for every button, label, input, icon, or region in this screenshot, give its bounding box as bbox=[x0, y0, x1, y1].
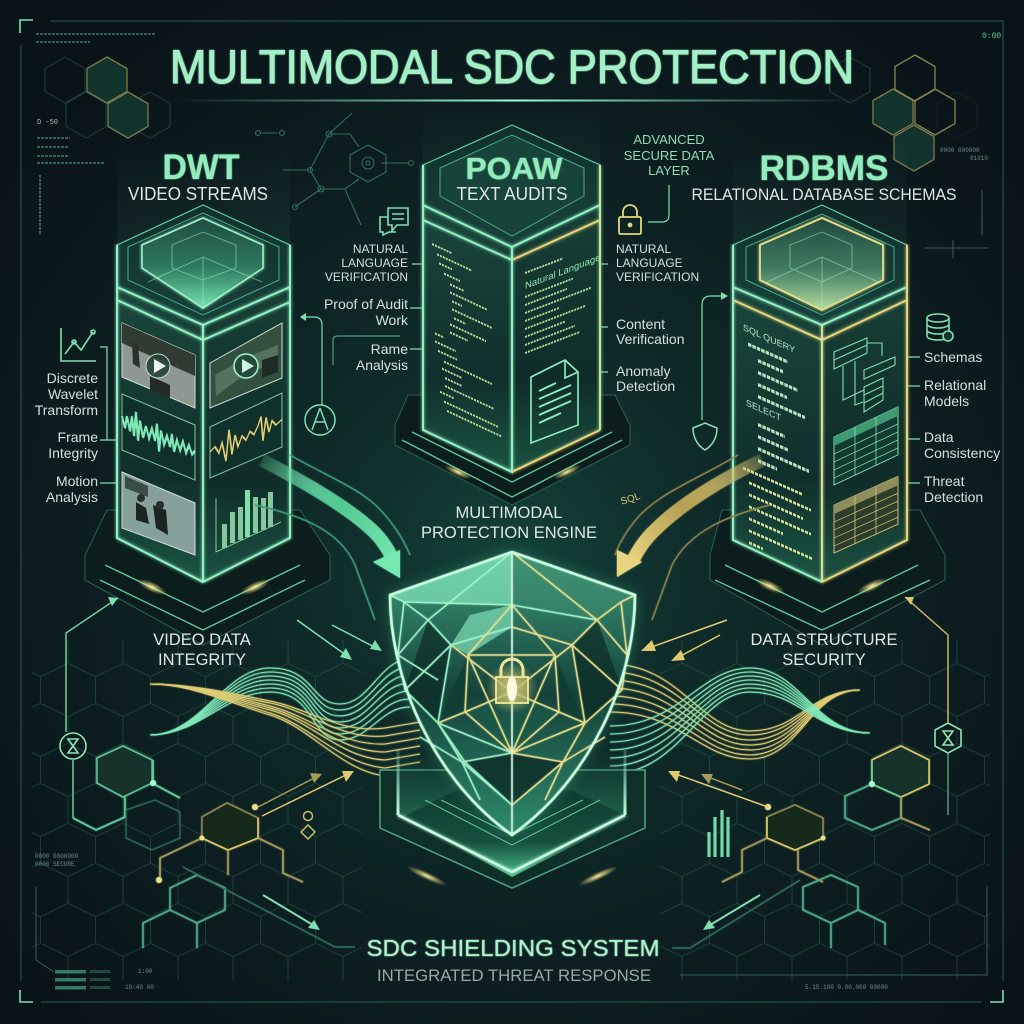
icon: padlock on shield bbox=[486, 659, 538, 714]
labels: text pillar left: NATURAL bbox=[353, 242, 408, 256]
labels: text pillar left: Proof of Audit bbox=[324, 296, 408, 312]
label: video data integrity bbox=[153, 631, 251, 669]
subheading: relational database schemas: RELATIONAL DATABASE SCHEMAS bbox=[692, 185, 956, 204]
labels: RDBMS pillar: Relational bbox=[924, 377, 986, 393]
labels: video pillar: Wavelet bbox=[48, 386, 98, 402]
natural language notes: Natural Language bbox=[525, 252, 601, 292]
tiny readouts: 1:00 bbox=[138, 968, 153, 975]
decorative readout bars bbox=[55, 970, 110, 990]
label: data structure security: DATA STRUCTURE bbox=[751, 631, 897, 649]
panel: RDBMS pillar bbox=[710, 130, 945, 645]
schema diagram bbox=[834, 338, 895, 412]
pillar faces bbox=[117, 287, 290, 582]
tiny readouts: 0:00 bbox=[982, 32, 1001, 41]
labels: text pillar left: Work bbox=[376, 312, 409, 328]
heading: RDBMS: RDBMS bbox=[760, 149, 888, 188]
SQL listing: SELECT bbox=[746, 397, 781, 423]
tiny readouts: 0000 000000 bbox=[940, 147, 980, 154]
code listing bbox=[432, 244, 502, 437]
labels: video pillar: Transform bbox=[35, 402, 98, 418]
label: video data integrity: INTEGRITY bbox=[158, 651, 246, 669]
label: video data integrity: VIDEO DATA bbox=[153, 631, 251, 649]
bar chart bbox=[216, 490, 281, 552]
connector lines bbox=[100, 185, 920, 483]
title: MULTIMODAL SDC PROTECTION bbox=[170, 40, 854, 93]
icon: padlock bbox=[619, 205, 641, 234]
panel: DWT video pillar bbox=[85, 130, 330, 645]
data waves: right green bbox=[610, 668, 870, 774]
label: data structure security bbox=[751, 631, 897, 669]
heading: multimodal protection engine: MULTIMODAL bbox=[456, 504, 562, 522]
small arrows bbox=[66, 597, 948, 930]
icon: compass bbox=[305, 405, 335, 435]
tiny readouts: 0000 SECURE bbox=[35, 861, 75, 868]
labels: video pillar: Frame bbox=[58, 429, 98, 445]
system heading: SDC SHIELDING SYSTEM bbox=[366, 935, 660, 961]
shield wireframe bbox=[390, 552, 635, 835]
small icons lower bbox=[301, 810, 728, 857]
bright hexagon paths: left bbox=[73, 746, 355, 948]
labels: text pillar left bbox=[324, 242, 409, 373]
icon: equalizer bars bbox=[709, 810, 728, 857]
labels: RDBMS pillar: Detection bbox=[924, 489, 983, 505]
labels: text pillar right: VERIFICATION bbox=[616, 270, 699, 284]
heading: multimodal protection engine bbox=[421, 504, 597, 542]
icon: line chart bbox=[61, 328, 96, 361]
pillar outline bbox=[423, 165, 600, 472]
labels: text pillar right: LANGUAGE bbox=[616, 256, 683, 270]
data waves: right gold bbox=[610, 664, 860, 759]
circuit network bbox=[256, 113, 414, 225]
system subheading: INTEGRATED THREAT RESPONSE bbox=[377, 967, 651, 985]
tiny readouts: 10:40 00 bbox=[125, 984, 154, 991]
heading: DWT: DWT bbox=[162, 148, 240, 187]
pillar base bbox=[395, 395, 630, 505]
shield facets bbox=[390, 552, 635, 805]
labels: text pillar right: Anomaly bbox=[616, 363, 670, 379]
labels: RDBMS pillar: Threat bbox=[924, 473, 965, 489]
labels: text pillar right: NATURAL bbox=[616, 242, 671, 256]
pillar faces bbox=[733, 287, 907, 582]
labels: text pillar left: LANGUAGE bbox=[341, 256, 408, 270]
arrow: video to engine bbox=[255, 455, 410, 620]
labels: text pillar left: VERIFICATION bbox=[325, 270, 408, 284]
label: data structure security: SECURITY bbox=[782, 651, 866, 669]
icon: target and diamond bbox=[301, 812, 315, 839]
labels: text pillar right bbox=[616, 242, 699, 394]
labels: RDBMS pillar: Schemas bbox=[924, 349, 982, 365]
label: SQL tag: SQL bbox=[619, 491, 642, 508]
heading: POAW: POAW bbox=[466, 151, 563, 186]
pillar faces bbox=[423, 205, 600, 472]
data waves: left gold bbox=[150, 684, 420, 776]
icon: hourglass right bbox=[935, 723, 961, 753]
icon: hourglass left bbox=[60, 733, 86, 759]
top crystal bbox=[142, 218, 263, 308]
tiny readouts: 01010 bbox=[970, 155, 988, 162]
tiny readouts: D -50 bbox=[37, 119, 58, 127]
tiny readouts: 0000 0000000 bbox=[35, 853, 79, 860]
video frame right bbox=[210, 323, 282, 408]
pillar outline bbox=[117, 245, 290, 582]
labels: text pillar right: Content bbox=[616, 316, 665, 332]
subheading: text audits: TEXT AUDITS bbox=[456, 184, 568, 204]
pillar base bbox=[85, 510, 330, 645]
shield pedestal bbox=[380, 750, 645, 889]
label: advanced secure data layer bbox=[624, 132, 715, 178]
labels: RDBMS pillar: Data bbox=[924, 429, 954, 445]
waveform green bbox=[122, 394, 195, 480]
table: green bbox=[834, 407, 898, 485]
icon: small shield bbox=[693, 423, 717, 450]
video frame bottom bbox=[122, 472, 195, 555]
arrow: database to engine bbox=[615, 455, 770, 620]
waveform gold bbox=[210, 393, 282, 478]
labels: RDBMS pillar: Models bbox=[924, 393, 969, 409]
heading: multimodal protection engine: PROTECTION ENGINE bbox=[421, 524, 597, 542]
bright hexagon paths: right bbox=[672, 746, 930, 948]
tiny readouts: 5.15.100 0.00.000 00000 bbox=[805, 984, 888, 991]
labels: text pillar right: Detection bbox=[616, 378, 675, 394]
label: advanced secure data layer: LAYER bbox=[648, 163, 690, 178]
icon: database bbox=[927, 314, 953, 341]
labels: video pillar: Integrity bbox=[48, 445, 98, 461]
SQL listing bbox=[743, 321, 813, 571]
subheading: video streams: VIDEO STREAMS bbox=[128, 184, 268, 204]
labels: RDBMS pillar: Consistency bbox=[924, 445, 1000, 461]
data waves: left green bbox=[150, 659, 410, 740]
SQL listing: SQL QUERY bbox=[743, 321, 796, 355]
natural language notes bbox=[525, 244, 601, 353]
labels: video pillar bbox=[35, 370, 98, 505]
labels: video pillar: Motion bbox=[56, 473, 98, 489]
label: advanced secure data layer: SECURE DATA bbox=[624, 148, 715, 163]
labels: text pillar left: Rame bbox=[371, 341, 408, 357]
pillar headings bbox=[128, 148, 956, 204]
labels: video pillar: Analysis bbox=[46, 489, 98, 505]
label: advanced secure data layer: ADVANCED bbox=[633, 132, 705, 147]
labels: text pillar left: Analysis bbox=[356, 357, 408, 373]
title rule bbox=[170, 100, 860, 102]
labels: video pillar: Discrete bbox=[47, 370, 98, 386]
shield bbox=[390, 552, 635, 835]
pillar outline bbox=[733, 245, 907, 582]
top crystal bbox=[760, 218, 883, 310]
panel: POAW text pillar bbox=[395, 100, 630, 505]
labels: RDBMS pillar bbox=[924, 349, 1000, 505]
icon: chat bubbles bbox=[380, 208, 408, 235]
video frame left bbox=[122, 323, 195, 408]
labels: text pillar right: Verification bbox=[616, 331, 684, 347]
table: gold bbox=[834, 476, 898, 553]
pillar base bbox=[710, 510, 945, 645]
icon: document bbox=[531, 360, 578, 443]
